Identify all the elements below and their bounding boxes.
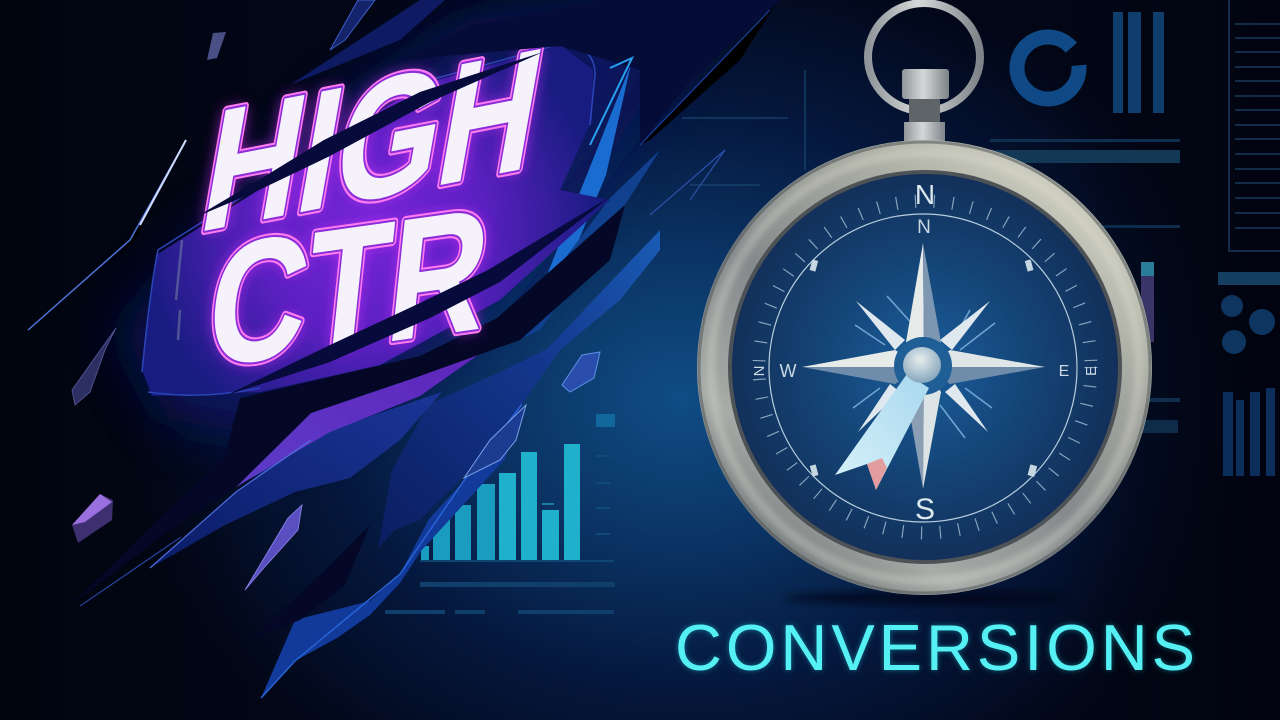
needle	[835, 374, 929, 490]
loop ring	[868, 3, 980, 111]
dial letters: S	[915, 493, 935, 526]
case bevel	[699, 142, 1150, 593]
shard: left band	[150, 392, 442, 568]
shard: big cloth right	[378, 230, 660, 548]
fragment: left	[72, 328, 116, 405]
headline	[189, 12, 555, 405]
diagonal markers	[810, 259, 1037, 477]
headline glow: CTR	[200, 171, 497, 405]
small bar behind compass	[1141, 262, 1154, 342]
highlight strokes on shards	[28, 10, 770, 698]
HIGH word: HIGH	[189, 12, 555, 270]
dial face	[732, 174, 1118, 560]
headline glow	[189, 12, 555, 405]
hub	[894, 337, 952, 395]
vertical bars top	[1113, 12, 1164, 113]
fragment: central blue	[464, 405, 526, 478]
shard: cyan sliver	[497, 64, 631, 349]
CTR word: CTR	[200, 171, 497, 405]
hub cap	[903, 347, 941, 383]
lined panel	[1229, 0, 1280, 251]
dial letters: N	[917, 217, 931, 238]
fragment: upper	[207, 32, 226, 60]
headline glow: HIGH	[189, 12, 555, 270]
dial letters: N	[751, 366, 768, 376]
bars lower right	[1223, 388, 1275, 476]
dial letters: N	[915, 179, 935, 210]
fragment: lower	[245, 505, 302, 590]
fragment: violet rock	[72, 494, 113, 543]
dial letters: E	[1059, 363, 1069, 380]
dial letters: E	[1083, 366, 1100, 376]
faint axes	[682, 70, 805, 185]
shard: lower band	[261, 404, 522, 698]
CTR word: CTR	[200, 171, 497, 405]
floating fragments	[72, 32, 600, 590]
diagonal star points	[856, 301, 990, 432]
dark band under headline	[70, 205, 625, 606]
minor star rays	[853, 296, 995, 438]
HIGH word: HIGH	[189, 12, 555, 270]
bar chart	[385, 414, 615, 614]
inner ring line	[769, 214, 1077, 522]
tick marks	[759, 201, 1091, 533]
HIGH word: HIGH	[189, 12, 555, 270]
panel: purple glow behind headline	[142, 44, 610, 396]
conversions label: CONVERSIONS	[675, 611, 1195, 684]
dark slashes over headline	[70, 0, 780, 640]
compass	[697, 3, 1152, 605]
dial letters: W	[780, 361, 796, 381]
glass shards: blue layers	[150, 0, 660, 698]
outer case	[697, 140, 1152, 595]
shard: purple lower	[236, 336, 505, 487]
horizontal bars	[990, 139, 1180, 228]
conversions label: CONVERSIONS	[675, 611, 1195, 684]
compass star	[802, 243, 1045, 489]
blob chart	[1221, 295, 1275, 354]
donut chart	[1017, 37, 1079, 99]
fragment: right blue	[562, 352, 600, 392]
dashboard backdrop: right side	[682, 0, 1280, 476]
shard: upper left	[290, 0, 445, 85]
crown and neck	[902, 69, 949, 142]
CTR word: CTR	[200, 171, 497, 405]
dial letters	[751, 179, 1100, 526]
shadow	[785, 591, 1065, 605]
